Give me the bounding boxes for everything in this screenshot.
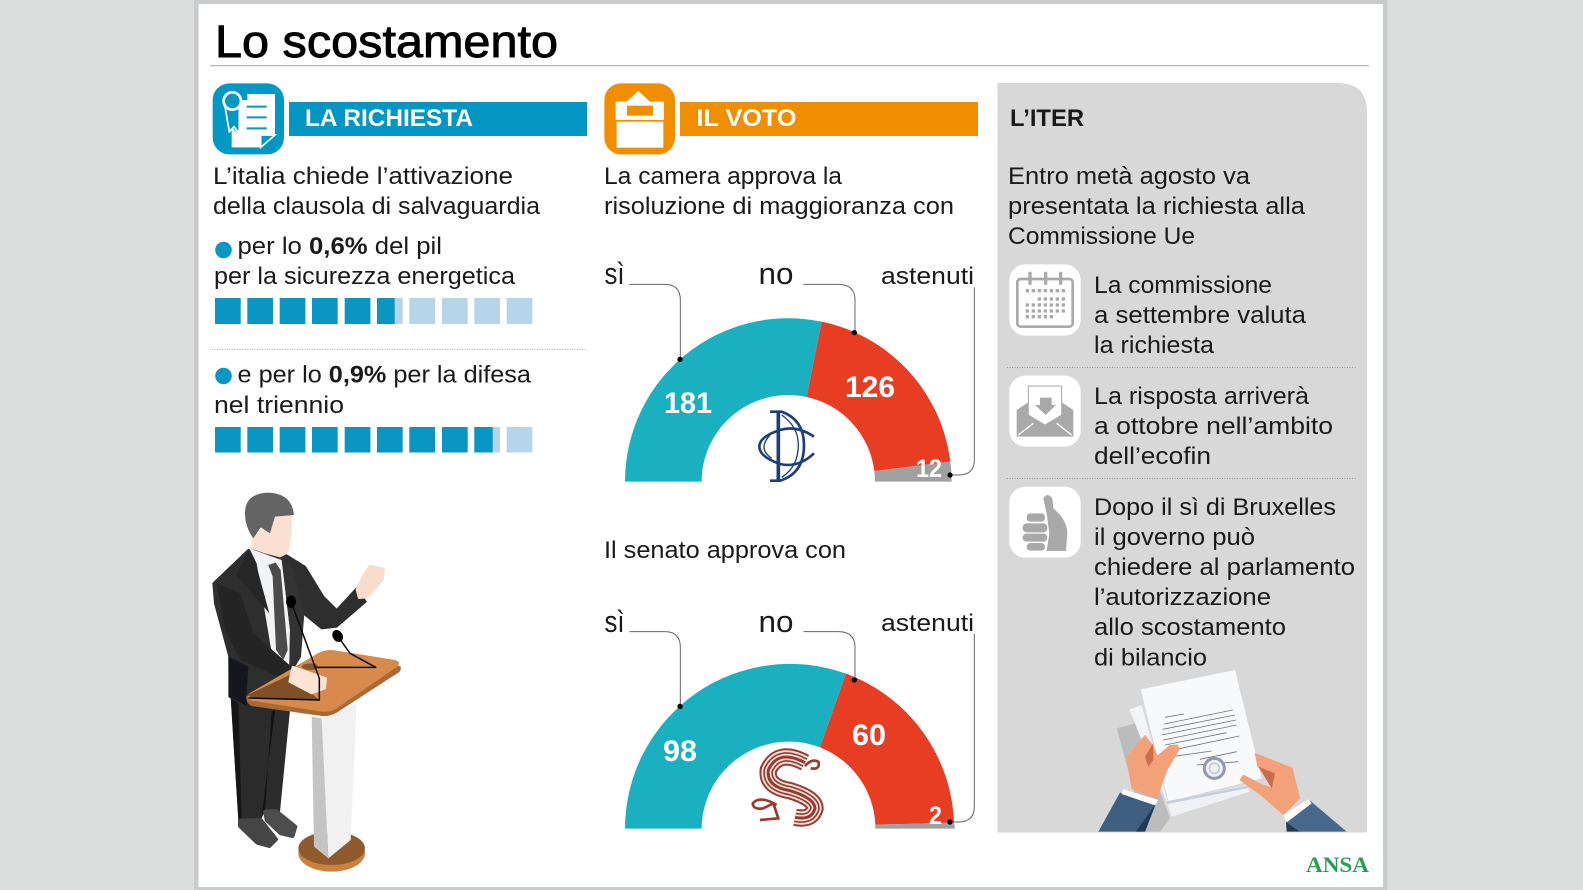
text: camera (604, 163, 954, 220)
text: intro (1008, 163, 1306, 250)
text: camera: risoluzione di maggioranza con (604, 193, 954, 220)
chart: senato hemicycle: 60 (852, 719, 886, 752)
icon: thumbs up (1009, 487, 1081, 558)
chart: camera hemicycle: astenuti (881, 263, 974, 290)
text: step 2: dell’ecofin (1094, 443, 1211, 470)
heading bar: la richiesta (289, 102, 587, 136)
text: step 3: Dopo il sì di Bruxelles (1094, 494, 1336, 521)
icon: calendar (1009, 264, 1081, 336)
item: 0,9%: nel triennio (214, 392, 344, 419)
chart: senato hemicycle: no (758, 604, 794, 639)
chart: 0,6 squares (215, 298, 532, 324)
chart: camera hemicycle: 12 (916, 455, 942, 483)
text: step 2 (1094, 383, 1333, 470)
item: 0,9%: e per lo 0,9% per la difesa (238, 362, 532, 388)
item: 0,6%: per la sicurezza energetica (214, 263, 516, 290)
text: step 3: chiedere al parlamento (1094, 554, 1355, 581)
chart: senato hemicycle: sì (604, 604, 624, 639)
white card (196, 2, 1385, 889)
chart: 0,9 squares (215, 427, 532, 452)
panel: la richiesta (212, 83, 587, 872)
text: step 2: La risposta arriverà (1094, 383, 1310, 410)
text: step 1: La commissione (1094, 272, 1272, 299)
text: intro: Entro metà agosto va (1008, 163, 1251, 190)
text: step 1: a settembre valuta (1094, 302, 1307, 329)
text: step 2: a ottobre nell’ambito (1094, 413, 1333, 440)
chart: camera hemicycle (604, 256, 974, 483)
text: step 3: allo scostamento (1094, 614, 1286, 641)
illustration: hands holding document (1098, 670, 1347, 832)
panel: il voto (604, 83, 978, 830)
text: camera: La camera approva la (604, 163, 843, 190)
text: step 3: di bilancio (1094, 644, 1207, 672)
heading bar: il voto: IL VOTO (696, 105, 796, 132)
chart: camera hemicycle: no (758, 256, 794, 291)
chart: senato hemicycle (604, 604, 974, 830)
logo: senato (753, 757, 819, 820)
intro text (213, 163, 541, 220)
icon: certificate (213, 83, 284, 154)
heading bar: il voto (680, 102, 978, 136)
text: step 3 (1094, 494, 1355, 672)
text: intro: presentata la richiesta alla (1008, 193, 1306, 220)
item: 0,6%: per lo 0,6% del pil (238, 233, 442, 260)
panel: l'iter (998, 83, 1367, 832)
item: 0,6% (214, 233, 516, 290)
icon: ballot box (604, 83, 675, 154)
logo: camera (759, 412, 814, 481)
chart: senato hemicycle: astenuti (881, 610, 974, 637)
title: Lo scostamento (215, 16, 558, 67)
item: 0,9% (214, 362, 532, 419)
text: senato: Il senato approva con (604, 537, 846, 564)
chart: camera hemicycle: sì (604, 256, 624, 291)
intro text: L’italia chiede l’attivazione (213, 163, 513, 190)
chart: camera hemicycle: 126 (845, 371, 895, 404)
text: step 3: l’autorizzazione (1094, 584, 1271, 611)
illustration: speaker at lectern (213, 493, 401, 872)
text: step 3: il governo può (1094, 524, 1255, 551)
chart: camera hemicycle: 181 (664, 387, 712, 420)
chart: senato hemicycle: 98 (663, 735, 697, 768)
text: step 1: la richiesta (1094, 332, 1215, 359)
intro text: della clausola di salvaguardia (213, 193, 541, 220)
text: step 1 (1094, 272, 1307, 359)
heading bar: la richiesta: LA RICHIESTA (305, 105, 473, 132)
heading: l'iter: L’ITER (1010, 105, 1084, 132)
text: intro: Commissione Ue (1008, 223, 1195, 250)
icon: envelope (1009, 376, 1081, 447)
logo: ansa: ANSA (1306, 852, 1369, 877)
chart: senato hemicycle: 2 (929, 802, 942, 830)
